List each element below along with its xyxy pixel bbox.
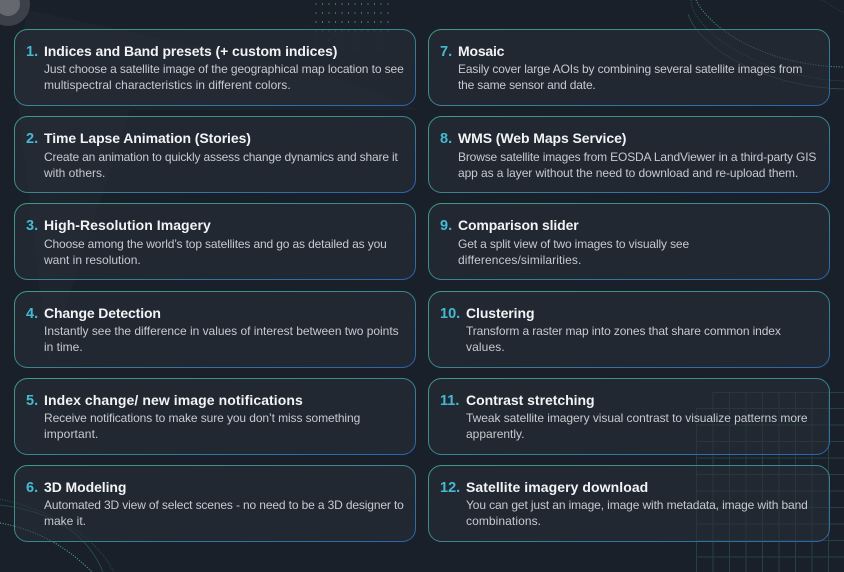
description 11: Tweak satellite imagery visual contrast to visualize patterns more	[466, 411, 808, 425]
description 12: You can get just an image, image with metadata, image with band	[466, 498, 808, 512]
number 6: 6.	[26, 480, 38, 496]
description 9	[458, 237, 689, 267]
title 5: Index change/ new image notifications	[44, 392, 303, 408]
description 6: make it.	[44, 514, 86, 528]
description 5: important.	[44, 427, 98, 441]
description 7: the same sensor and date.	[458, 78, 596, 92]
description 3: want in resolution.	[44, 253, 141, 267]
card 9	[428, 203, 830, 280]
number 1: 1.	[26, 44, 38, 60]
title 12: Satellite imagery download	[466, 479, 648, 495]
description 4	[44, 324, 399, 354]
card 3	[14, 203, 416, 280]
title 6: 3D Modeling	[44, 479, 126, 495]
description 3	[44, 237, 387, 267]
description 1: Just choose a satellite image of the geographical map location to see	[44, 62, 404, 76]
title 3: High-Resolution Imagery	[44, 217, 211, 233]
description 10: Transform a raster map into zones that share common index	[466, 324, 781, 338]
card 7	[428, 29, 830, 106]
description 1	[44, 62, 404, 92]
number 12: 12.	[440, 480, 460, 496]
description 2: Create an animation to quickly assess change dynamics and share it	[44, 150, 398, 164]
title 11: Contrast stretching	[466, 392, 595, 408]
description 6: Automated 3D view of select scenes - no need to be a 3D designer to	[44, 498, 404, 512]
description 4: in time.	[44, 340, 83, 354]
title 1: Indices and Band presets (+ custom indices)	[44, 43, 337, 59]
number 8: 8.	[440, 131, 452, 147]
description 7: Easily cover large AOIs by combining several satellite images from	[458, 62, 802, 76]
description 10: values.	[466, 340, 505, 354]
card 1	[14, 29, 416, 106]
description 8: app as a layer without the need to download and re-upload them.	[458, 166, 798, 180]
description 10	[466, 324, 781, 354]
title 10: Clustering	[466, 305, 534, 321]
description 12	[466, 498, 808, 528]
number 3: 3.	[26, 218, 38, 234]
card 6	[14, 465, 416, 542]
title 9: Comparison slider	[458, 217, 579, 233]
description 9: differences/similarities.	[458, 253, 581, 267]
description 9: Get a split view of two images to visually see	[458, 237, 689, 251]
card 4	[14, 291, 416, 368]
number 5: 5.	[26, 393, 38, 409]
number 2: 2.	[26, 131, 38, 147]
description 4: Instantly see the difference in values of interest between two points	[44, 324, 399, 338]
number 10: 10.	[440, 306, 460, 322]
title 2: Time Lapse Animation (Stories)	[44, 130, 251, 146]
description 8: Browse satellite images from EOSDA LandViewer in a third-party GIS	[458, 150, 816, 164]
description 2	[44, 150, 398, 180]
description 3: Choose among the world’s top satellites and go as detailed as you	[44, 237, 387, 251]
card 12	[428, 465, 830, 542]
title 8: WMS (Web Maps Service)	[458, 130, 626, 146]
description 7	[458, 62, 802, 92]
title 7: Mosaic	[458, 43, 504, 59]
number 4: 4.	[26, 306, 38, 322]
description 8	[458, 150, 816, 180]
description 6	[44, 498, 404, 528]
card 2	[14, 116, 416, 193]
description 11: apparently.	[466, 427, 524, 441]
description 12: combinations.	[466, 514, 541, 528]
title 4: Change Detection	[44, 305, 161, 321]
number 9: 9.	[440, 218, 452, 234]
card 10	[428, 291, 830, 368]
description 1: multispectral characteristics in different colors.	[44, 78, 291, 92]
card 8	[428, 116, 830, 193]
description 5: Receive notifications to make sure you don’t miss something	[44, 411, 360, 425]
number 7: 7.	[440, 44, 452, 60]
description 11	[466, 411, 808, 441]
card 5	[14, 378, 416, 455]
card 11	[428, 378, 830, 455]
description 2: with others.	[44, 166, 105, 180]
description 5	[44, 411, 360, 441]
number 11: 11.	[440, 393, 459, 409]
